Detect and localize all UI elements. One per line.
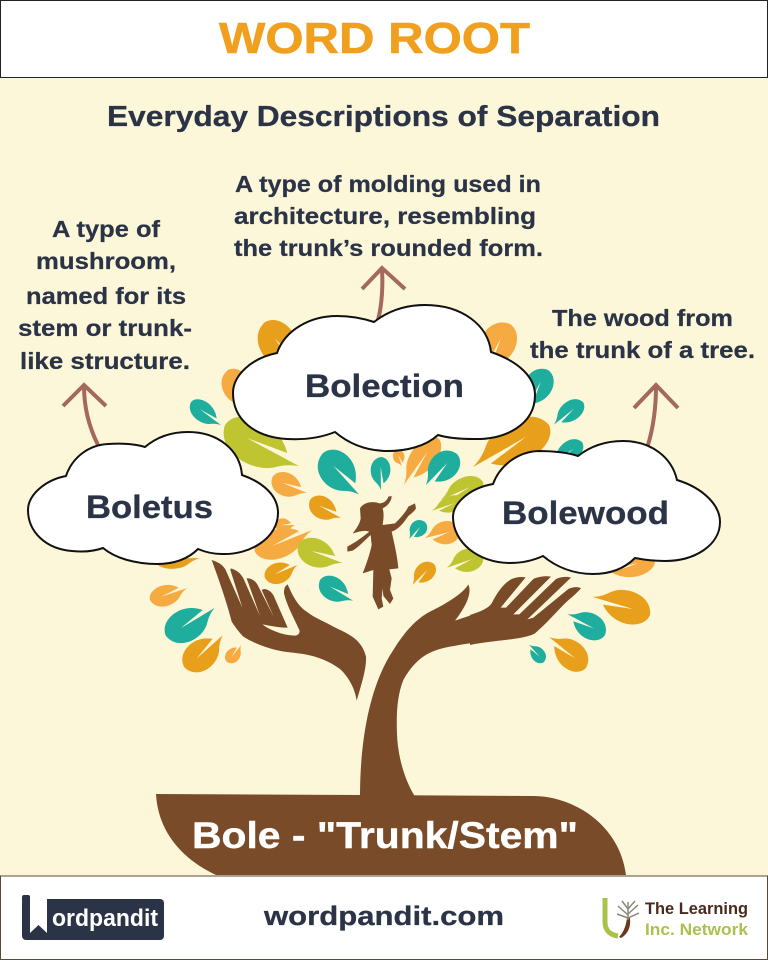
tree leaves	[147, 312, 658, 680]
cloud: Bolection: Bolection	[305, 368, 464, 404]
text: boletus definition	[18, 216, 192, 374]
right hand and trunk	[360, 576, 581, 797]
text: bolewood definition: The wood from	[552, 305, 733, 331]
text: boletus definition: like structure.	[20, 348, 190, 374]
text: boletus definition: named for its	[26, 283, 186, 309]
child silhouette	[347, 496, 416, 609]
text: bolection definition: architecture, resembling	[234, 203, 536, 229]
website: wordpandit.com	[263, 901, 504, 931]
text: boletus definition: A type of	[52, 216, 160, 242]
arrow: left	[63, 385, 106, 445]
left hand	[212, 560, 366, 701]
cloud: Bolewood	[453, 441, 720, 574]
text: bolewood definition: the trunk of a tree.	[530, 337, 755, 363]
header band	[0, 0, 768, 78]
logo: wordpandit: ordpandit	[52, 905, 158, 932]
root word label: Bole - "Trunk/Stem"	[192, 815, 578, 856]
cloud: Boletus: Boletus	[86, 489, 213, 525]
text: boletus definition: mushroom,	[36, 248, 176, 274]
heading: word root: WORD ROOT	[219, 14, 530, 63]
cloud: Bolection	[233, 305, 535, 451]
text: bolection definition: the trunk’s rounded form.	[234, 235, 543, 261]
text: boletus definition: stem or trunk-	[18, 315, 192, 341]
logo: the learning inc network: The Learning	[645, 899, 748, 918]
subtitle: Everyday Descriptions of Separation	[107, 101, 660, 133]
text: bolection definition: A type of molding used in	[235, 171, 541, 197]
text: bolewood definition	[530, 305, 755, 363]
logo: the learning inc network	[605, 898, 749, 939]
text: bolection definition	[234, 171, 543, 261]
tree trunk with two hands	[212, 560, 581, 797]
arrow: right	[634, 385, 678, 445]
cloud: Boletus	[28, 432, 278, 564]
arrow: centre	[362, 268, 405, 320]
logo: wordpandit	[22, 895, 164, 940]
logo: the learning inc network: Inc. Network	[645, 920, 749, 939]
cloud: Bolewood: Bolewood	[502, 495, 669, 531]
footer band	[0, 876, 768, 960]
ground mound	[156, 794, 626, 875]
